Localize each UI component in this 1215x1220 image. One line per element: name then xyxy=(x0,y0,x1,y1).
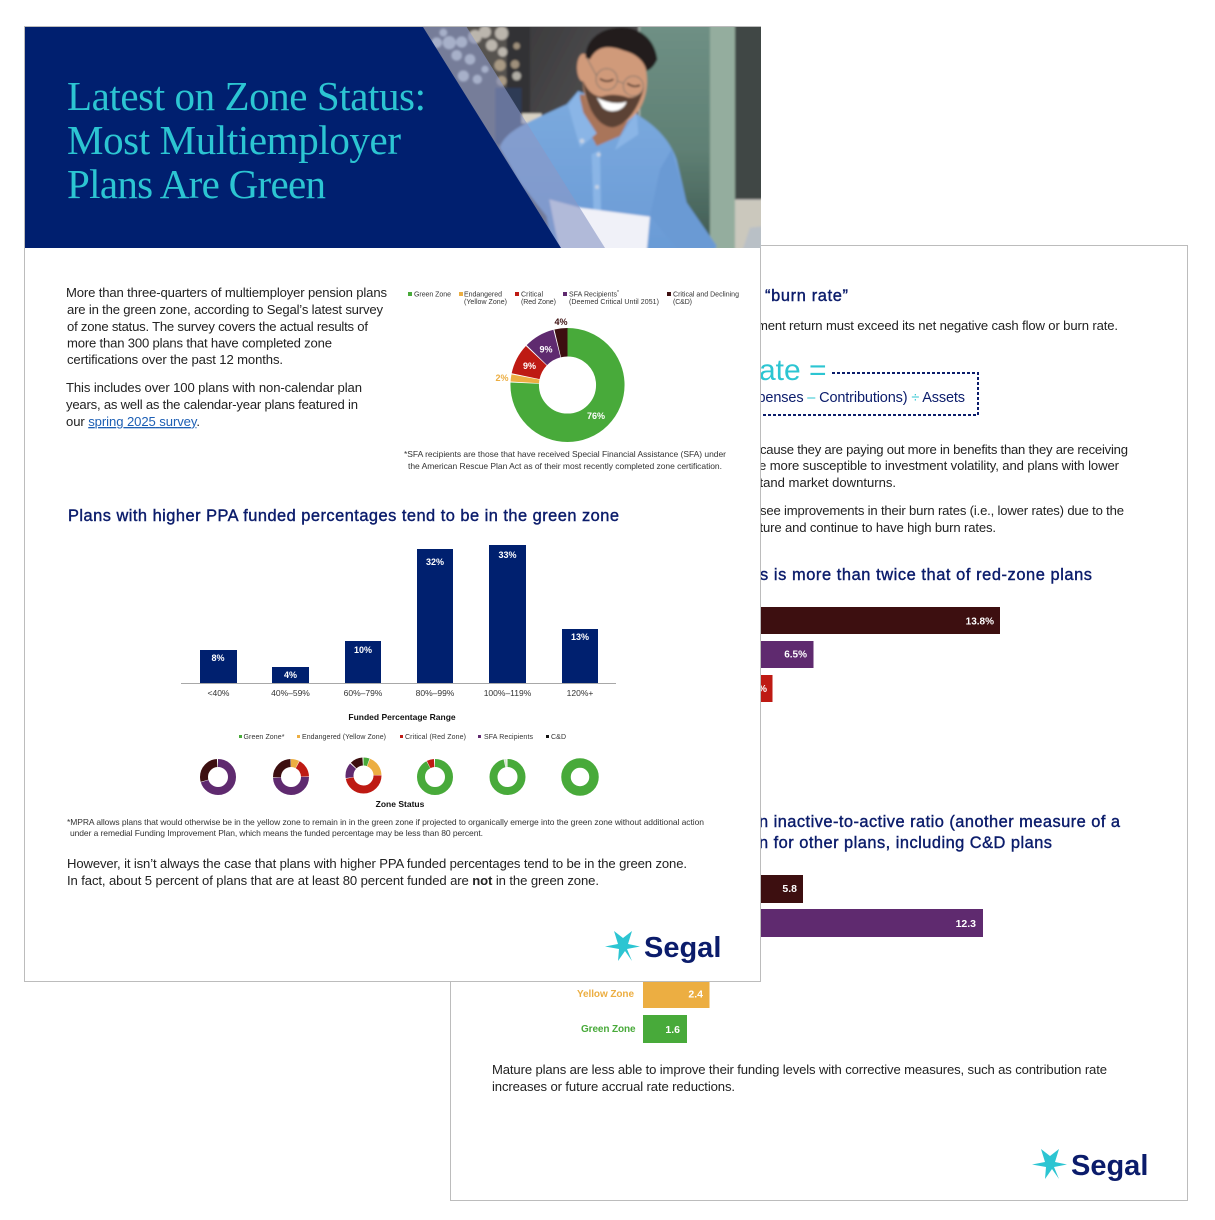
bar chart: inactive-to-active ratio: Yellow Zone xyxy=(577,989,634,1000)
bar chart: inactive-to-active ratio: Green Zone xyxy=(581,1024,636,1035)
donut: 80 to 99 percent xyxy=(421,763,449,791)
text block: intro: years, as well as the calendar-year plans featured in xyxy=(66,397,358,412)
header banner xyxy=(25,23,765,253)
photo: smiling man reading paper xyxy=(423,27,761,248)
title xyxy=(67,73,426,207)
bar chart: inactive-to-active ratio: 1.6 xyxy=(665,1024,680,1036)
bar chart: inactive-to-active ratio: 12.3 xyxy=(956,918,976,930)
heading: funded percentages: Plans with higher PPA funded percentages tend to be in the green zone xyxy=(68,507,619,525)
text block: conclusion: However, it isn’t always the case that plans with higher PPA funded percentages tend to be in the green zone. xyxy=(67,856,687,871)
bar chart: funded percentage range: 4% xyxy=(284,670,297,680)
panel: front page zone status xyxy=(24,23,765,981)
logo: Segal back page xyxy=(1032,1149,1148,1182)
footnote: MPRA xyxy=(67,817,704,838)
text block: intro: of zone status. The survey covers the actual results of xyxy=(67,319,368,334)
bar chart: funded percentage range: 13% xyxy=(571,632,589,642)
legend: zone status: SFA Recipients xyxy=(569,292,618,298)
legend: zone status: Green Zone xyxy=(414,292,451,298)
text block: burn rate explanation: e more susceptible to investment volatility, and plans with lower xyxy=(759,458,1120,473)
legend: small donuts: C&D xyxy=(551,734,566,741)
bar chart: funded percentage range: 100%–119% xyxy=(484,688,532,698)
footnote: MPRA: under a remedial Funding Improvement Plan, which means the funded percentage may be less than 80 percent. xyxy=(70,828,483,838)
donut: 100 to 119 percent xyxy=(494,763,522,791)
bar chart: funded percentage range: <40% xyxy=(208,688,230,698)
legend: small donuts: Endangered (Yellow Zone) xyxy=(302,734,386,741)
heading: inactive-to-active ratio: n for other plans, including C&D plans xyxy=(759,834,1052,852)
donut chart: plans by zone: 2% xyxy=(495,373,509,383)
text block: intro: our spring 2025 survey. xyxy=(66,414,200,429)
bar chart: funded percentage range: 10% xyxy=(354,645,372,655)
bar chart: burn rate by zone xyxy=(740,607,1000,702)
text block: burn rate explanation: ture and continue to have high burn rates. xyxy=(760,520,996,535)
bar chart: inactive-to-active ratio: 2.4 xyxy=(688,988,703,1000)
bar chart: burn rate by zone: 6.5% xyxy=(784,650,807,660)
title: Most Multiemployer xyxy=(67,117,401,163)
bar chart: funded percentage range: 80%–99% xyxy=(416,688,455,698)
text block: burn rate explanation: see improvements in their burn rates (i.e., lower rates) due to the xyxy=(760,503,1124,518)
legend: zone status: Critical and Declining xyxy=(673,292,739,298)
text block: intro: more than 300 plans that have completed zone xyxy=(67,336,332,350)
logo: Segal front page xyxy=(605,931,721,964)
legend: zone status: * xyxy=(617,290,619,296)
text block: intro: This includes over 100 plans with non-calendar plan xyxy=(66,380,362,395)
text block: conclusion xyxy=(67,856,687,888)
logo: Segal back page: Segal xyxy=(1071,1150,1148,1182)
text block: intro: are in the green zone, according to Segal’s latest survey xyxy=(67,302,383,317)
bar chart: burn rate by zone: 13.8% xyxy=(966,616,994,628)
bar chart: funded percentage range: 8% xyxy=(211,653,225,663)
legend: zone status: Critical xyxy=(521,292,543,298)
bar chart: funded percentage range: 60%–79% xyxy=(344,688,383,698)
text block: intro: More than three-quarters of multiemployer pension plans xyxy=(66,285,387,300)
bar chart: funded percentage range xyxy=(181,545,616,722)
donut chart: plans by zone: 4% xyxy=(554,317,568,327)
text block: burn rate explanation xyxy=(759,442,1128,535)
legend: zone status: (Deemed Critical Until 2051) xyxy=(569,299,659,306)
bar chart: funded percentage range: Funded Percentage Range xyxy=(348,712,456,722)
footnote: SFA recipients: the American Rescue Plan Act as of their most recently completed zone certification. xyxy=(408,461,722,471)
heading: burn rate: “burn rate” xyxy=(765,287,848,305)
donut: under 40 percent xyxy=(204,763,232,791)
text block: intro xyxy=(66,285,387,429)
legend: small donuts xyxy=(239,734,566,741)
text block: mature plans: increases or future accrual rate reductions. xyxy=(492,1079,735,1094)
text block: burn rate explanation: tand market downturns. xyxy=(760,475,896,490)
label: zone status: Zone Status xyxy=(376,799,425,809)
logo: Segal front page: Segal xyxy=(644,932,721,964)
footnote: SFA recipients xyxy=(404,449,726,471)
bar chart: burn rate by zone: % xyxy=(758,684,767,695)
text block: burn rate explanation: cause they are paying out more in benefits than they are receiving xyxy=(760,442,1128,457)
bar chart: funded percentage range: 40%–59% xyxy=(271,688,310,698)
text block: mature plans: Mature plans are less able to improve their funding levels with corrective measures, such as contribution rate xyxy=(492,1062,1107,1077)
donut chart: plans by zone: 9% xyxy=(523,361,536,371)
legend: small donuts: Critical (Red Zone) xyxy=(405,734,466,741)
legend: zone status: (C&D) xyxy=(673,299,692,306)
bar chart: inactive-to-active ratio xyxy=(577,875,983,1043)
heading: inactive-to-active ratio xyxy=(759,813,1121,852)
heading: burn rate chart: s is more than twice that of red-zone plans xyxy=(760,566,1092,584)
formula: burn rate xyxy=(757,354,978,415)
title: Latest on Zone Status: xyxy=(67,73,426,119)
panel: back page burn rate xyxy=(450,246,1188,1200)
text block: mature plans xyxy=(492,1062,1107,1094)
legend: zone status: (Yellow Zone) xyxy=(464,299,507,306)
heading: inactive-to-active ratio: n inactive-to-active ratio (another measure of a xyxy=(759,813,1121,831)
formula: burn rate: ate = xyxy=(759,354,827,387)
formula: burn rate: penses – Contributions) ÷ Assets xyxy=(758,390,965,406)
donut chart: plans by zone: 9% xyxy=(539,344,553,354)
legend: zone status: (Red Zone) xyxy=(521,299,556,306)
donut chart: plans by zone xyxy=(495,317,610,428)
bar chart: inactive-to-active ratio: 5.8 xyxy=(782,883,797,895)
text block: conclusion: In fact, about 5 percent of plans that are at least 80 percent funded are not in the green zone. xyxy=(67,873,599,888)
footnote: SFA recipients: *SFA recipients are those that have received Special Financial Assistance (SFA) under xyxy=(404,449,726,459)
legend: small donuts: Green Zone* xyxy=(244,734,285,741)
legend: zone status xyxy=(408,290,739,306)
title: Plans Are Green xyxy=(67,161,326,207)
donut: 60 to 79 percent xyxy=(350,762,378,790)
bar chart: funded percentage range: 120%+ xyxy=(567,688,593,698)
text block: intro: certifications over the past 12 months. xyxy=(67,352,283,367)
donut: 120 percent plus xyxy=(566,763,594,791)
donut chart: plans by zone: 76% xyxy=(587,411,605,421)
legend: small donuts: SFA Recipients xyxy=(484,734,534,741)
donut: 40 to 59 percent xyxy=(277,763,305,791)
text block: burn rate intro: ment return must exceed its net negative cash flow or burn rate. xyxy=(757,318,1118,333)
small donut charts: zone status xyxy=(204,762,594,791)
footnote: MPRA: *MPRA allows plans that would otherwise be in the yellow zone to remain in in the green zone if projected to organically emerge into the green zone without additional action xyxy=(67,817,704,827)
legend: zone status: Endangered xyxy=(464,292,502,298)
bar chart: funded percentage range: 32% xyxy=(426,557,444,567)
bar chart: funded percentage range: 33% xyxy=(498,550,517,560)
